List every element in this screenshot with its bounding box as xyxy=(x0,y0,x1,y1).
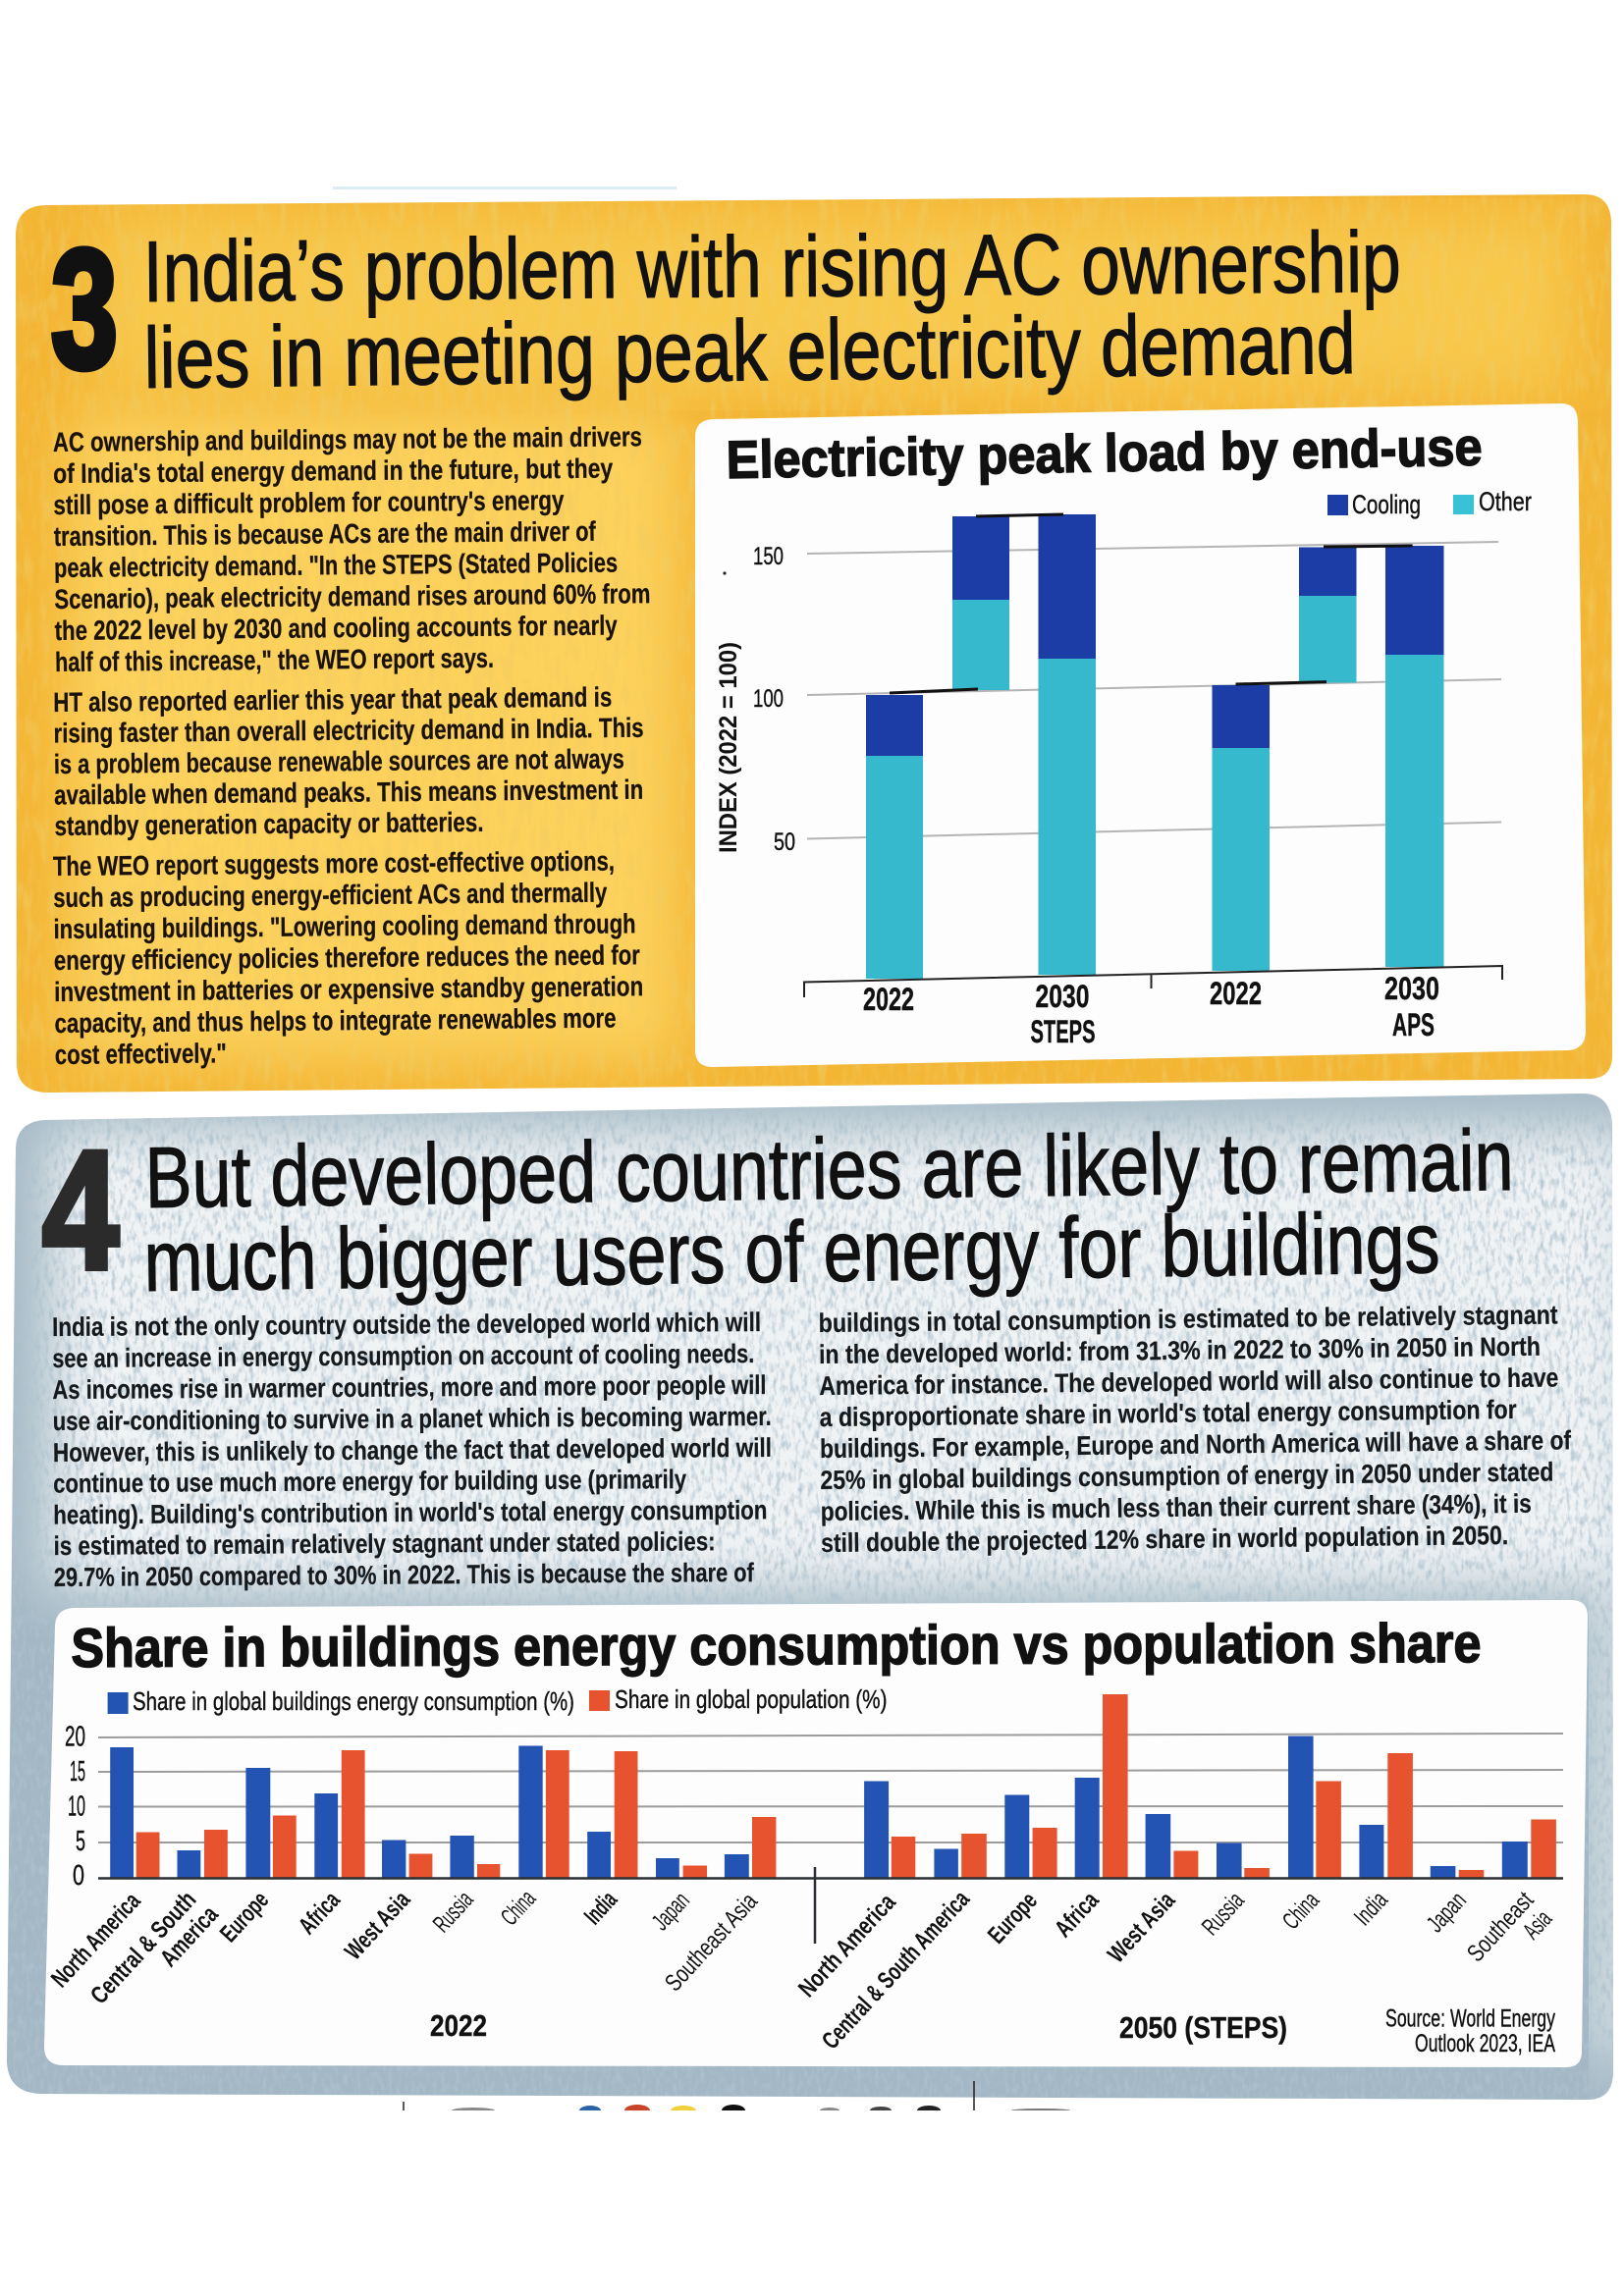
text block: section 4 left column: heating). Building's contribution in world's total energy consumption xyxy=(53,1495,767,1529)
category labels: 2022: Central & South xyxy=(85,1886,201,2009)
panel background: yellow xyxy=(0,187,1624,1099)
bar: STEPS 2022 xyxy=(866,695,923,979)
text block: section 3 paragraph 1: AC ownership and buildings may not be the main drivers xyxy=(53,421,642,457)
text block: section 3 paragraph 3: energy efficiency policies therefore reduces the need for xyxy=(54,939,640,976)
category labels: 2022: West Asia xyxy=(340,1886,416,1965)
bar: STEPS 2030 xyxy=(1039,514,1096,975)
text block: section 3 paragraph 3: cost effectively." xyxy=(55,1038,227,1070)
text block: section 4 left column: is estimated to remain relatively stagnant under stated policies: xyxy=(53,1526,716,1561)
x axis and divider xyxy=(98,1867,1563,1944)
panel: buildings energy vs population chart xyxy=(44,1600,1588,2067)
text block: section 4 left column: use air-conditioning to survive in a planet which is becoming warmer. xyxy=(53,1402,772,1436)
panel background: grey xyxy=(0,1085,1624,2110)
text block: section 3 paragraph 1: peak electricity demand. "In the STEPS (Stated Policies xyxy=(54,547,618,583)
text block: section 3 paragraph 2: HT also reported earlier this year that peak demand is xyxy=(53,682,612,718)
category labels: 2022: Europe xyxy=(215,1887,274,1948)
category labels: 2022: Southeast Asia xyxy=(660,1888,763,1997)
panel: electricity peak load chart xyxy=(695,403,1586,1067)
y axis labels: 5 xyxy=(76,1826,85,1857)
x axis labels xyxy=(863,971,1439,1049)
category labels: 2050: India xyxy=(1349,1887,1393,1931)
text block: section 4 right column xyxy=(818,1300,1573,1558)
heading: section 3 xyxy=(142,213,1401,406)
text block: section 4 left column: However, this is unlikely to change the fact that developed world will xyxy=(53,1433,772,1468)
category labels: 2022: India xyxy=(579,1886,623,1930)
connector lines between bars xyxy=(890,514,1413,693)
x axis labels: APS xyxy=(1392,1007,1435,1042)
category labels: 2050: China xyxy=(1277,1887,1325,1935)
text block: section 4 left column: 29.7% in 2050 compared to 30% in 2022. This is because the share of xyxy=(54,1558,755,1592)
chart title: Electricity peak load by end-use xyxy=(726,418,1483,490)
text block: section 3 paragraph 3: The WEO report suggests more cost-effective options, xyxy=(53,846,615,881)
legend: Share in global buildings energy consumption (%) xyxy=(133,1686,574,1716)
panel: section 3 peak electricity demand xyxy=(0,187,1624,1099)
y axis labels: 150 xyxy=(753,543,784,570)
y axis labels: 20 xyxy=(65,1722,85,1753)
legend: cooling and other xyxy=(1327,487,1532,519)
category labels: 2022: Africa xyxy=(294,1886,346,1940)
category labels: 2022: America xyxy=(155,1900,224,1972)
text block: section 3 paragraph 1: half of this increase," the WEO report says. xyxy=(55,643,494,677)
faint blue print line above the yellow panel xyxy=(333,187,677,189)
text block: section 4 left column: continue to use much more energy for building use (primarily xyxy=(53,1465,686,1498)
text block: section 4 right column: a disproportionate share in world's total energy consumption for xyxy=(820,1395,1517,1432)
text block: section 3 paragraph 3: capacity, and thus helps to integrate renewables more xyxy=(54,1003,617,1039)
gridlines xyxy=(98,1734,1563,1842)
bar: STEPS increase xyxy=(952,516,1009,690)
source note: Outlook 2023, IEA xyxy=(1415,2030,1555,2057)
next-page print marks along the bottom edge xyxy=(0,2081,1624,2122)
text block: section 4 left column: see an increase in energy consumption on account of cooling needs. xyxy=(52,1339,754,1373)
chart card background xyxy=(695,403,1586,1067)
category labels: 2050: Africa xyxy=(1050,1886,1105,1943)
x axis labels: 2022 xyxy=(863,982,914,1017)
bar: APS increase xyxy=(1299,548,1357,683)
text block: section 4 left column: As incomes rise in warmer countries, more and more poor people will xyxy=(52,1370,767,1405)
legend: Share in global population (%) xyxy=(615,1684,888,1714)
y axis labels: 10 xyxy=(68,1790,85,1822)
blue bars: energy share 2050 xyxy=(864,1735,1528,1878)
text block: section 3 paragraph 2: standby generation capacity or batteries. xyxy=(54,807,484,841)
red bars: population share 2050 xyxy=(892,1694,1556,1878)
bar: APS 2022 xyxy=(1212,685,1270,971)
text block: section 3 paragraph 2 xyxy=(53,681,645,841)
category labels: 2050: West Asia xyxy=(1103,1886,1181,1968)
x axis labels: STEPS xyxy=(1031,1014,1096,1049)
category labels: 2050 xyxy=(793,1885,1557,2055)
y axis title: INDEX (2022 = 100) xyxy=(715,642,742,853)
y axis labels xyxy=(65,1722,85,1892)
text block: section 4 right column: still double the projected 12% share in world population in 2050. xyxy=(821,1521,1508,1558)
category labels: 2022: Japan xyxy=(647,1887,695,1936)
x axis labels: 2030 xyxy=(1035,979,1090,1014)
category labels: 2022: China xyxy=(496,1885,541,1931)
category labels: 2022: Russia xyxy=(428,1886,479,1938)
chart title: Share in buildings energy consumption vs population share xyxy=(71,1612,1482,1679)
source note xyxy=(1385,2004,1555,2057)
text block: section 3 paragraph 1: transition. This is because ACs are the main driver of xyxy=(54,516,596,552)
panel: section 4 developed countries xyxy=(0,1085,1624,2110)
bar: APS 2030 xyxy=(1385,546,1443,967)
text block: section 3 paragraph 2: is a problem because renewable sources are not always xyxy=(54,743,624,779)
legend: cooling and other: Other xyxy=(1479,487,1532,516)
text block: section 3 paragraph 3 xyxy=(53,845,644,1070)
number 4: 4 xyxy=(42,1116,119,1305)
text block: section 3 paragraph 3: such as producing energy-efficient ACs and thermally xyxy=(53,878,608,913)
text block: section 3 paragraph 3: insulating buildings. "Lowering cooling demand through xyxy=(53,908,636,944)
category labels: 2050: Southeast xyxy=(1462,1887,1540,1967)
stacked bars xyxy=(866,514,1443,979)
legend xyxy=(108,1684,888,1716)
category labels: 2050: Japan xyxy=(1422,1887,1472,1938)
source note: Source: World Energy xyxy=(1385,2004,1555,2032)
y axis labels: 0 xyxy=(73,1860,84,1892)
text block: section 3 paragraph 2: rising faster than overall electricity demand in India. This xyxy=(53,713,644,749)
gridlines xyxy=(807,542,1501,838)
text block: section 4 left column: India is not the only country outside the developed world which will xyxy=(52,1308,761,1342)
blue bars: energy share 2022 xyxy=(110,1745,749,1878)
bars: 2050 STEPS xyxy=(864,1694,1556,1878)
heading: section 3: lies in meeting peak electricity demand xyxy=(143,294,1356,406)
chart card background xyxy=(44,1600,1588,2067)
number 3: 3 xyxy=(51,215,118,403)
text block: section 3 paragraph 2: available when demand peaks. This means investment in xyxy=(54,774,643,810)
x axis labels: 2030 xyxy=(1384,971,1439,1006)
category labels: 2022: North America xyxy=(46,1887,146,1993)
category labels: 2050: Europe xyxy=(983,1887,1043,1949)
x axis bracket xyxy=(804,966,1502,997)
text block: section 3 paragraph 1: Scenario), peak electricity demand rises around 60% from xyxy=(54,578,651,614)
red bars: population share 2022 xyxy=(136,1750,776,1878)
bars: 2022 xyxy=(110,1745,776,1878)
y axis labels: 50 xyxy=(774,828,795,856)
text block: section 3 paragraph 1: of India's total energy demand in the future, but they xyxy=(53,454,614,489)
text block: section 4 left column xyxy=(52,1308,773,1592)
y axis labels xyxy=(723,543,795,856)
y axis labels: 100 xyxy=(753,685,784,713)
category labels: 2022 xyxy=(46,1885,763,2009)
text block: section 3 paragraph 3: investment in batteries or expensive standby generation xyxy=(54,971,643,1007)
text block: section 3 paragraph 1: the 2022 level by 2030 and cooling accounts for nearly xyxy=(55,610,618,646)
heading: section 4 xyxy=(143,1111,1514,1309)
panel: buildings energy vs population chart: 15 xyxy=(70,1756,85,1788)
text block: section 3 paragraph 1: still pose a difficult problem for country's energy xyxy=(53,485,565,520)
text block: section 3 paragraph 1 xyxy=(53,421,651,677)
category labels: 2050: Russia xyxy=(1197,1887,1250,1941)
category labels: 2050: North America xyxy=(793,1888,901,2002)
group label: 2050 STEPS: 2050 (STEPS) xyxy=(1119,2010,1287,2045)
x axis labels: 2022 xyxy=(1210,976,1262,1011)
legend: cooling and other: Cooling xyxy=(1352,490,1421,519)
group label: 2022: 2022 xyxy=(430,2008,487,2043)
category labels: 2050: Central & South America xyxy=(817,1885,975,2055)
category labels: 2050: Asia xyxy=(1518,1905,1557,1945)
